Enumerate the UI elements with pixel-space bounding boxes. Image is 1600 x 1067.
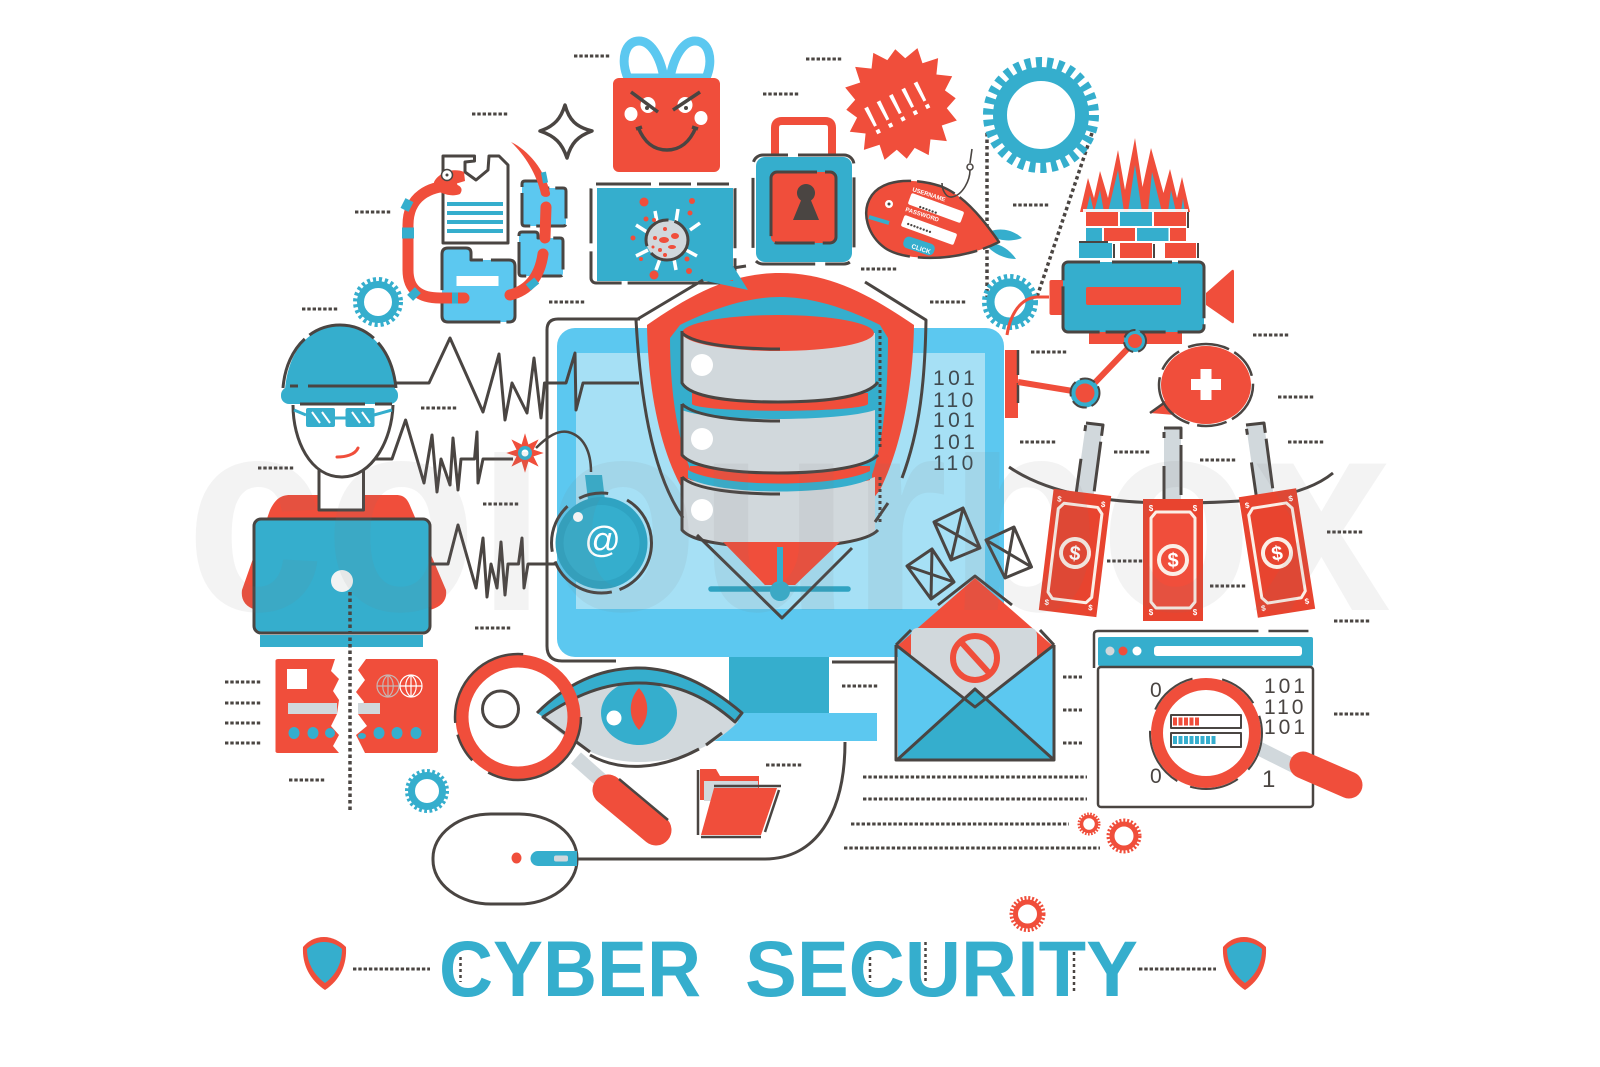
icon: dotted frame lines around gears	[987, 133, 1092, 300]
hat dome	[285, 326, 395, 390]
screen binary text: 101	[933, 409, 978, 432]
icon: worm attacking document and folders	[402, 142, 566, 322]
worm body	[408, 186, 546, 298]
monitor stand	[729, 657, 829, 713]
chart: signal line 1	[395, 338, 639, 420]
icon: chat bubble tail	[706, 266, 748, 290]
icon: clothes pin 3	[1246, 423, 1274, 501]
title	[439, 924, 1138, 1013]
icon: small envelopes	[907, 508, 1032, 599]
icon: banknote 1: $	[1088, 603, 1094, 613]
icon: email bomb: @	[584, 519, 620, 560]
laptop lid	[254, 519, 430, 633]
shield outline	[636, 280, 926, 618]
lower shield fill	[723, 542, 840, 585]
icon: clothes line	[1009, 467, 1333, 503]
iris	[601, 681, 677, 745]
screen binary text: 101	[933, 431, 978, 454]
title bar	[1098, 637, 1313, 666]
worm bands	[402, 177, 547, 298]
icon: security camera	[1007, 262, 1234, 352]
icon: banknote 2: $	[1193, 608, 1198, 617]
window body	[1098, 667, 1313, 807]
icon: banknote 3: $	[1304, 597, 1310, 606]
icon: open folder	[698, 769, 781, 837]
laptop logo	[331, 570, 353, 592]
laptop base	[260, 635, 423, 647]
icon: folder	[442, 248, 515, 322]
lower band	[690, 466, 870, 486]
icon: email bomb	[552, 475, 652, 593]
middle cylinder	[682, 410, 875, 472]
screen binary text: 110	[933, 452, 977, 475]
document lines	[447, 204, 503, 231]
icon: phishing fish	[866, 149, 1022, 259]
hacker face	[293, 405, 393, 477]
icon: burst with exclamation marks: !!!!!	[857, 71, 940, 144]
icon: banknote 3: $	[1270, 542, 1284, 566]
icon: banknote 3: $	[1288, 494, 1294, 503]
icon: computer mouse	[433, 742, 845, 904]
icon: phishing fish: CLICK	[910, 243, 932, 256]
icon: clothes pin 2	[1164, 428, 1181, 505]
magnifier lens	[1157, 684, 1255, 782]
icon: phishing fish: ••••••	[917, 202, 939, 218]
screen binary text: 110	[933, 389, 977, 412]
icon: hacker	[242, 325, 446, 647]
icon: explosion	[506, 433, 544, 473]
icon: small folders	[522, 181, 566, 226]
panel: browser window	[1094, 631, 1349, 807]
panel: monitor	[547, 319, 1004, 741]
icon: banknote 3: $	[1261, 603, 1267, 613]
binary digits: 101	[1264, 716, 1308, 739]
title: CYBER	[439, 924, 701, 1013]
glasses	[306, 408, 374, 427]
binary digits: 1	[1262, 766, 1278, 793]
icon: plus speech bubble	[1150, 344, 1253, 426]
second small folder	[519, 232, 563, 276]
icon: torn document	[443, 156, 508, 243]
small circle in lens	[482, 691, 518, 727]
icon: banknote 2: $	[1149, 608, 1154, 617]
envelope front	[899, 689, 1053, 760]
icon: broken credit card	[275, 659, 438, 753]
icon: bomb fuse	[536, 432, 591, 472]
database outlines	[682, 331, 878, 547]
icon: monitor side mount and arm	[1005, 341, 1135, 418]
lower cylinder	[682, 477, 875, 547]
pupil	[631, 688, 647, 730]
chart: signal line 2	[375, 420, 513, 492]
letter	[911, 628, 1037, 725]
browser outer frame	[1094, 631, 1320, 668]
network connector	[777, 547, 783, 590]
envelope back flap	[896, 578, 1054, 720]
icon: large gear	[989, 63, 1093, 167]
monitor base	[700, 713, 877, 741]
lens ring	[462, 661, 574, 773]
icon: banknote 3	[1239, 488, 1315, 618]
dotted side line	[878, 330, 882, 523]
decorative dotted text placeholders	[225, 56, 1370, 969]
icon: firewall with flames	[1079, 138, 1198, 258]
icon: banknote 2	[1143, 499, 1203, 621]
hacker body	[242, 495, 446, 610]
icon: padlock	[753, 121, 854, 264]
magnifier handle	[576, 758, 603, 782]
screen binary text	[933, 367, 978, 475]
binary digits: 101	[1264, 675, 1308, 698]
icon: four point star	[540, 105, 592, 158]
watermark: colourbox	[186, 359, 1393, 669]
icon: phishing fish: ••••••••	[905, 219, 933, 237]
smile	[337, 448, 358, 457]
binary digits: 110	[1264, 696, 1306, 719]
icon: title shield right	[1223, 937, 1266, 990]
progress bars	[1171, 715, 1241, 728]
top of database	[682, 315, 874, 351]
hacker neck	[319, 465, 364, 510]
screen binary text: 101	[933, 367, 978, 390]
envelope sides	[898, 645, 1054, 760]
envelope outline	[896, 576, 1054, 760]
icon: gear next to camera	[985, 277, 1035, 327]
icon: evil gift box	[613, 41, 720, 172]
monitor outline	[547, 319, 640, 661]
binary digits: 0	[1150, 765, 1165, 788]
chart: signal line 3	[430, 525, 557, 597]
icon: banknote 1: $	[1100, 500, 1106, 509]
monitor inner screen	[576, 353, 985, 609]
upper cylinder	[682, 333, 875, 402]
icon: banknote 2: $	[1193, 504, 1198, 513]
icon: phishing fish: USERNAME	[911, 187, 946, 204]
icon: banknote 3: $	[1244, 501, 1251, 510]
magnifier handle	[1258, 748, 1296, 767]
icon: phishing fish: PASSWORD	[904, 207, 940, 224]
binary digits: 0	[1150, 679, 1165, 702]
icon: spam envelope	[896, 576, 1054, 760]
binary digits	[1150, 675, 1308, 793]
icon: magnifier and eye	[455, 654, 742, 830]
icon: shielded database	[636, 273, 926, 618]
shield red	[647, 273, 914, 585]
icon: banknote 1: $	[1044, 598, 1050, 607]
dotted line from laptop	[348, 592, 352, 813]
icon: virus chat bubble	[591, 184, 746, 283]
icon: small gear left	[356, 280, 400, 324]
title dotted accents	[460, 942, 1074, 993]
hat brim	[281, 387, 398, 404]
icon: red gears	[1012, 814, 1140, 930]
icon: banknote 2: $	[1149, 504, 1154, 513]
worm head	[434, 170, 465, 195]
icon: burst with exclamation marks	[841, 44, 961, 164]
eye white	[543, 683, 738, 762]
shield teal core	[670, 297, 888, 480]
no entry sign	[953, 636, 997, 680]
title: SECURITY	[745, 924, 1138, 1013]
database status lights	[691, 354, 713, 376]
icon: banknote 2: $	[1167, 550, 1179, 572]
icon: title shield left	[303, 937, 346, 990]
monitor screen	[557, 328, 1004, 657]
middle band	[682, 395, 880, 422]
upper lid	[537, 668, 742, 722]
icon: banknote 1	[1039, 489, 1111, 617]
icon: banknote 1: $	[1057, 494, 1063, 504]
icon: small gear bottom left	[408, 772, 446, 810]
icon: clothes pin 1	[1076, 423, 1103, 500]
lens white area	[468, 667, 568, 767]
icon: banknote 1: $	[1068, 542, 1082, 566]
